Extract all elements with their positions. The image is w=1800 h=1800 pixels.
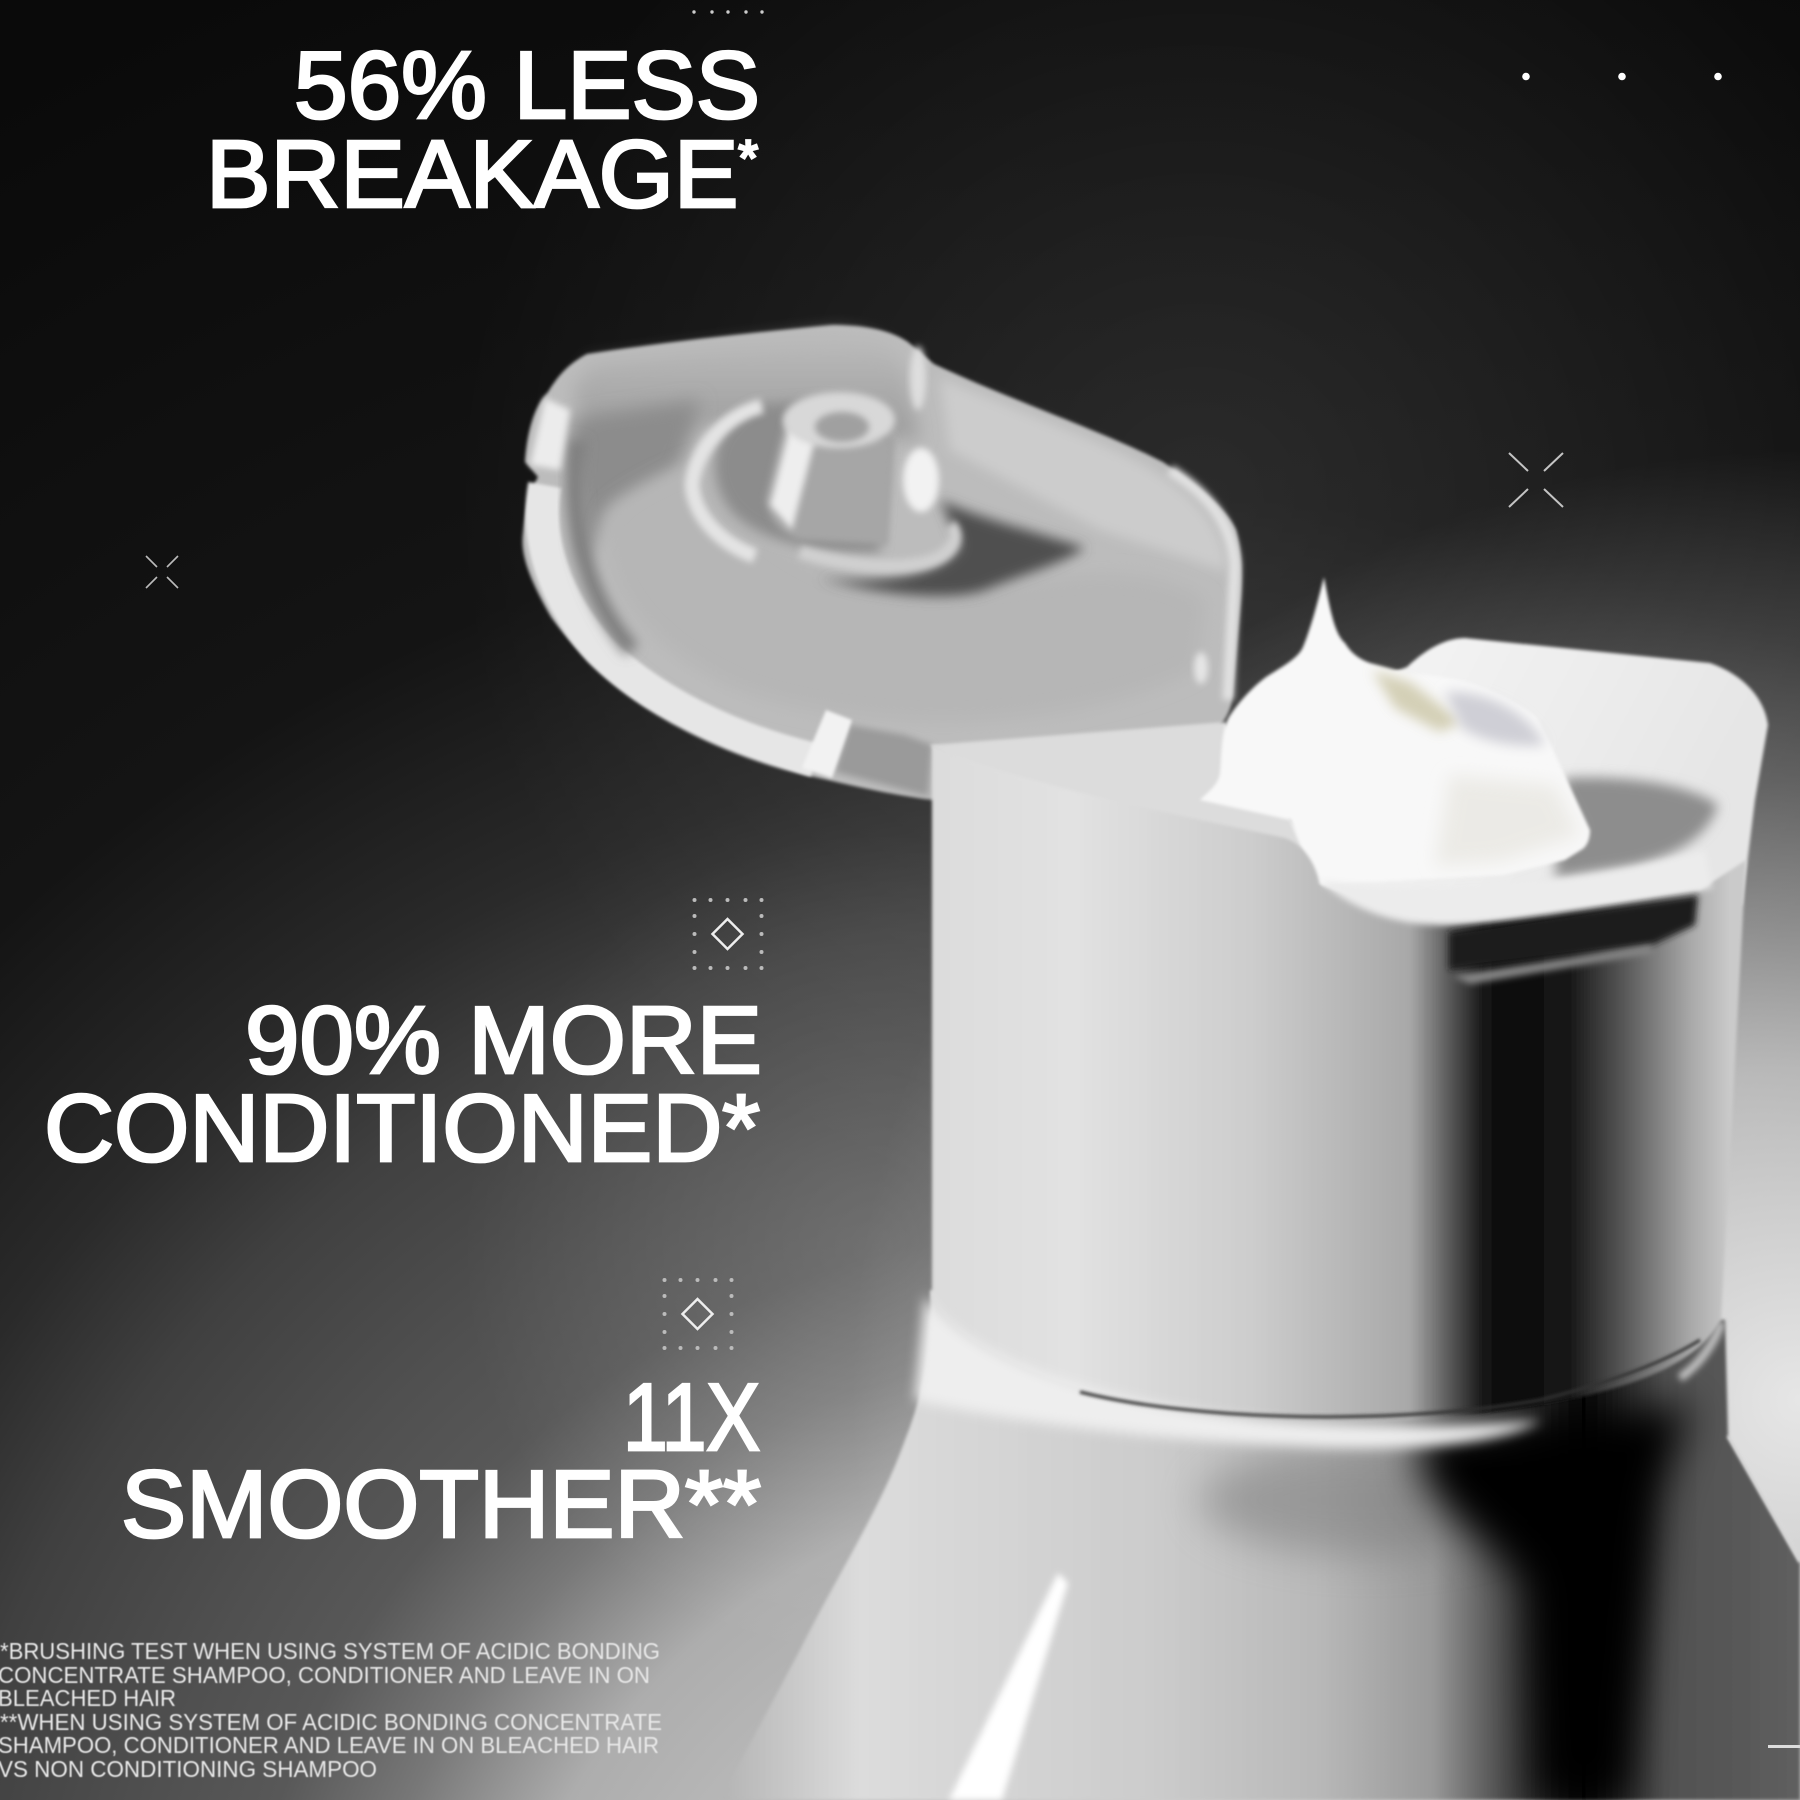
footnotes: **WHEN USING SYSTEM OF ACIDIC BONDING CONCENTRATE	[0, 1709, 662, 1735]
lid right highlight	[1194, 652, 1208, 684]
recess highlight	[1453, 945, 1652, 984]
footnotes: *BRUSHING TEST WHEN USING SYSTEM OF ACIDIC BONDING	[0, 1638, 660, 1664]
lid well shadow	[575, 440, 632, 650]
heading: 11x smoother: 11X	[623, 1364, 760, 1471]
lid hinge tab highlight	[802, 710, 852, 778]
heading: 56% less breakage: *	[738, 130, 758, 186]
lid upper rim recess	[572, 334, 920, 485]
nozzle highlight	[770, 425, 815, 530]
top right dots	[1522, 73, 1722, 80]
icon: dotted diamond 2	[662, 1278, 734, 1350]
heading: 11x smoother: SMOOTHER**	[121, 1451, 761, 1558]
lid right rim arc	[1170, 470, 1235, 700]
cream shaded fold	[1445, 692, 1545, 746]
flip-top lid	[522, 325, 1242, 800]
bottle right edge highlight	[1728, 1436, 1800, 1562]
dark band below lip	[1449, 895, 1698, 970]
nozzle body	[765, 415, 893, 545]
highlight streak on bottle	[949, 1573, 1068, 1800]
shadow under cap	[1420, 1405, 1690, 1800]
bottom right tick	[1768, 1745, 1800, 1748]
dark well	[1555, 777, 1718, 878]
lid left latch highlight	[530, 398, 570, 470]
heading: 56% less breakage: 56% LESS	[294, 32, 760, 139]
cap bottom edge line	[1080, 1340, 1700, 1417]
nozzle ring lower	[800, 525, 955, 566]
icon: sparkle cross right	[1509, 453, 1563, 507]
soft shading on shoulder	[1200, 1445, 1540, 1555]
footnotes: BLEACHED HAIR	[0, 1685, 176, 1711]
lid side knob highlight	[903, 448, 939, 512]
heading: 11x smoother	[121, 1364, 761, 1558]
footnotes: SHAMPOO, CONDITIONER AND LEAVE IN ON BLEACHED HAIR	[0, 1732, 659, 1758]
lid outer shell	[522, 325, 1242, 800]
nozzle tip	[783, 392, 895, 448]
heading: 90% more conditioned	[44, 987, 762, 1182]
interior deck	[930, 722, 1340, 890]
footnotes: CONCENTRATE SHAMPOO, CONDITIONER AND LEAVE IN ON	[0, 1662, 650, 1688]
cream dollop	[1200, 577, 1590, 885]
cream base shade	[1435, 775, 1580, 866]
ring interior	[714, 400, 890, 553]
lid dark crease	[820, 500, 1085, 596]
back rim	[1320, 638, 1768, 905]
lid left dark zone	[570, 400, 700, 565]
corner highlight below cap	[1680, 1322, 1722, 1378]
heading: 56% less breakage: BREAKAGE	[206, 121, 734, 228]
lid lower-left rim	[542, 485, 815, 760]
heading: 90% more conditioned: 90% MORE	[245, 987, 762, 1094]
lid inner disc	[605, 460, 1205, 721]
top dotted row	[692, 10, 764, 14]
front lip	[1320, 850, 1712, 925]
lid hinge grey tab	[835, 725, 932, 796]
nozzle opening	[815, 412, 869, 442]
lid upper right surface	[940, 378, 1228, 572]
cap cylinder	[932, 745, 1746, 1421]
heading: 56% less breakage	[206, 32, 760, 228]
shine under cap edge	[915, 1295, 1542, 1448]
rim corner highlight	[910, 346, 926, 410]
heading: 90% more conditioned: CONDITIONED*	[44, 1075, 760, 1182]
footnotes: VS NON CONDITIONING SHAMPOO	[0, 1756, 377, 1782]
cap rim and opening	[930, 638, 1768, 905]
cream yellow tint	[1372, 670, 1462, 732]
footnotes	[0, 1638, 662, 1782]
nozzle ring left	[692, 406, 762, 556]
bottle shoulder	[720, 1290, 1800, 1800]
icon: dotted diamond 1	[692, 898, 764, 970]
icon: sparkle cross left	[146, 556, 178, 588]
